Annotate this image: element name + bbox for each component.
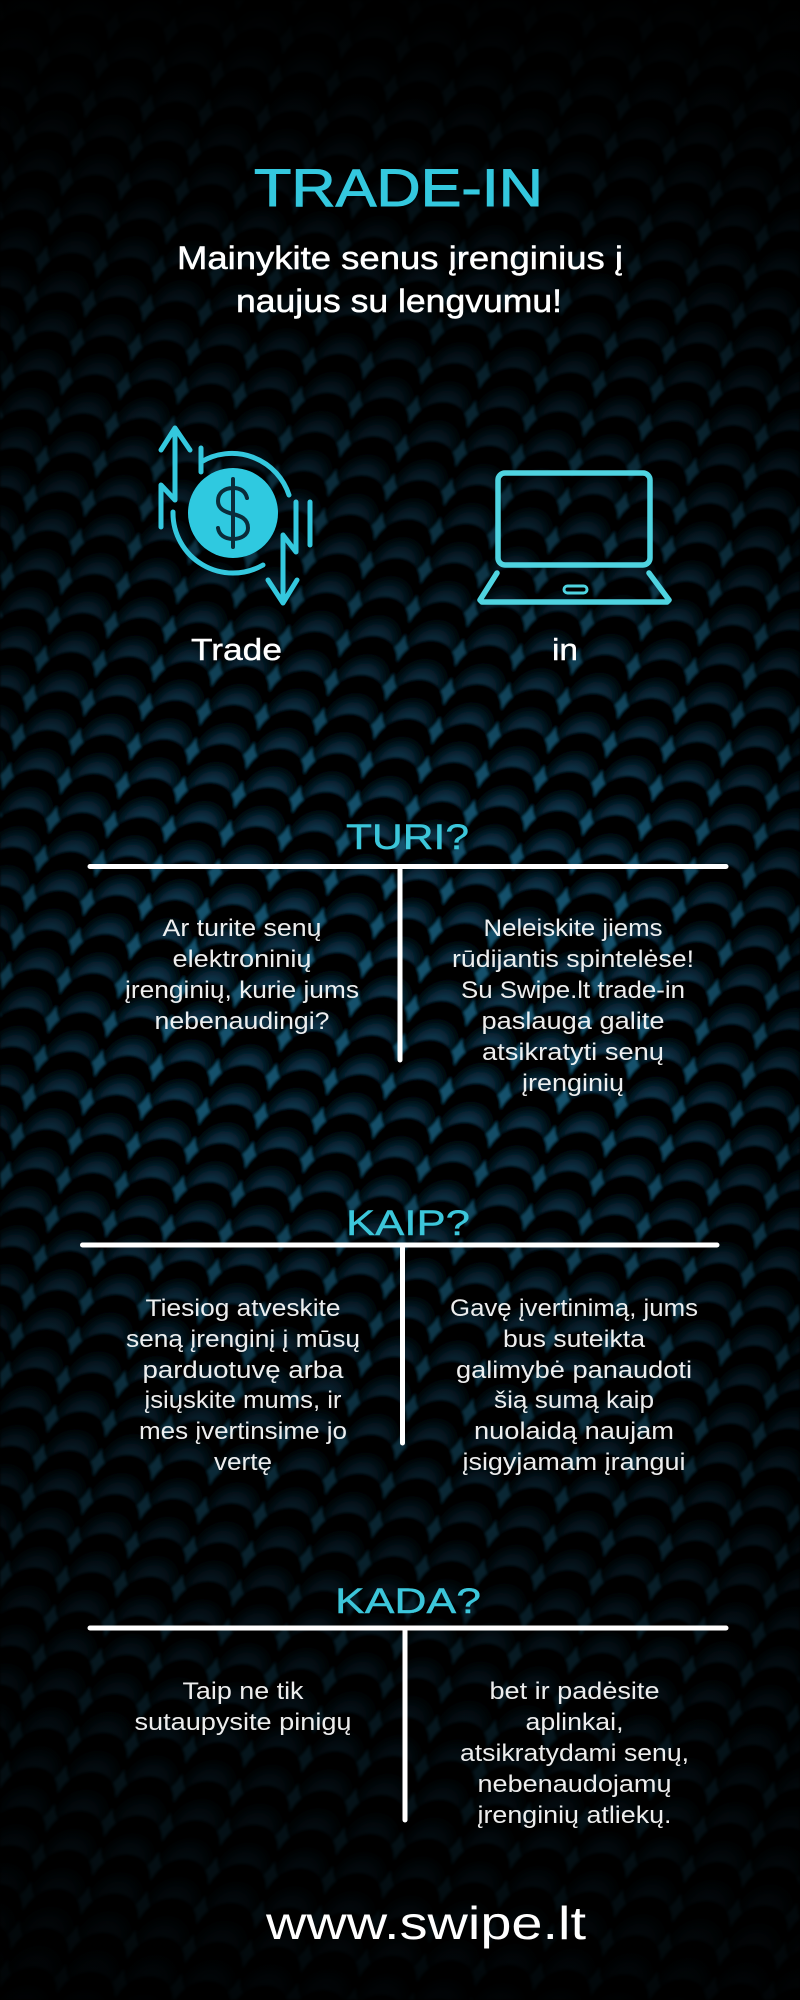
icon: laptop [480,473,669,602]
text: environment: bet ir padėsite [490,1678,660,1705]
text: step two: Gavę įvertinimą, jums [450,1295,698,1322]
text: step one: seną įrenginį į mūsų [126,1326,360,1353]
text: environment: atsikratydami senų, [460,1740,689,1767]
subtitle [177,240,623,319]
text: savings [134,1678,352,1736]
text: answer: įrenginių [522,1070,624,1097]
text: step one: mes įvertinsime jo [139,1418,347,1445]
text: savings: sutaupysite pinigų [134,1709,352,1736]
up arrow [161,428,190,527]
heading: KAIP?: KAIP? [346,1204,470,1243]
vertical divider [402,1630,408,1820]
text: step one: įsiųskite mums, ir [144,1387,342,1414]
panel: TURI [90,818,726,1097]
text: question [125,915,359,1035]
text: environment: nebenaudojamų [478,1771,672,1798]
text: step one [126,1295,360,1476]
title: TRADE-IN [254,159,543,218]
heading: KADA?: KADA? [335,1582,481,1621]
label: in: in [552,632,578,667]
top arc [201,448,289,495]
subtitle: naujus su lengvumu! [236,283,562,319]
coin [188,468,278,558]
horizontal rule [90,1626,726,1630]
laptop screen [498,473,650,565]
text: environment: įrenginių atliekų. [478,1802,672,1829]
text: answer: rūdijantis spintelėse! [452,946,694,973]
vertical divider [398,868,402,1060]
text: answer: Su Swipe.lt trade-in [461,977,685,1004]
label: Trade: Trade [191,632,282,667]
subtitle: Mainykite senus įrenginius į [177,240,623,276]
dollar sign [218,479,248,547]
horizontal rule [82,1242,717,1248]
vertical divider [400,1248,405,1443]
text: answer: paslauga galite [482,1008,664,1035]
text: step one: parduotuvę arba [142,1357,344,1384]
bottom arc [173,512,263,573]
text: step one: vertę [214,1449,272,1476]
laptop base [480,573,669,602]
text: step two: bus suteikta [503,1326,646,1353]
text: answer [452,915,694,1097]
down arrow [268,502,310,603]
panel: KAIP [82,1204,717,1476]
horizontal rule [90,864,726,869]
text: environment [460,1678,689,1829]
website URL: www.swipe.lt [265,1897,586,1949]
text: step one: Tiesiog atveskite [146,1295,340,1322]
panel: KADA [90,1582,726,1829]
text: question: nebenaudingi? [154,1008,330,1035]
text: answer: Neleiskite jiems [484,915,662,942]
text: step two: nuolaidą naujam [474,1418,674,1445]
text: question: įrenginių, kurie jums [125,977,359,1004]
text: environment: aplinkai, [526,1709,624,1736]
icon: dollar coin with exchange arrows [161,428,310,603]
text: step two: įsigyjamam įrangui [462,1449,686,1476]
text: step two [450,1295,698,1476]
text: question: elektroninių [172,946,312,973]
touchpad [564,586,587,593]
text: step two: šią sumą kaip [494,1387,654,1414]
text: question: Ar turite senų [162,915,322,942]
text: answer: atsikratyti senų [482,1039,664,1066]
text: step two: galimybė panaudoti [456,1357,692,1384]
text: savings: Taip ne tik [182,1678,305,1705]
heading: TURI?: TURI? [346,818,469,857]
